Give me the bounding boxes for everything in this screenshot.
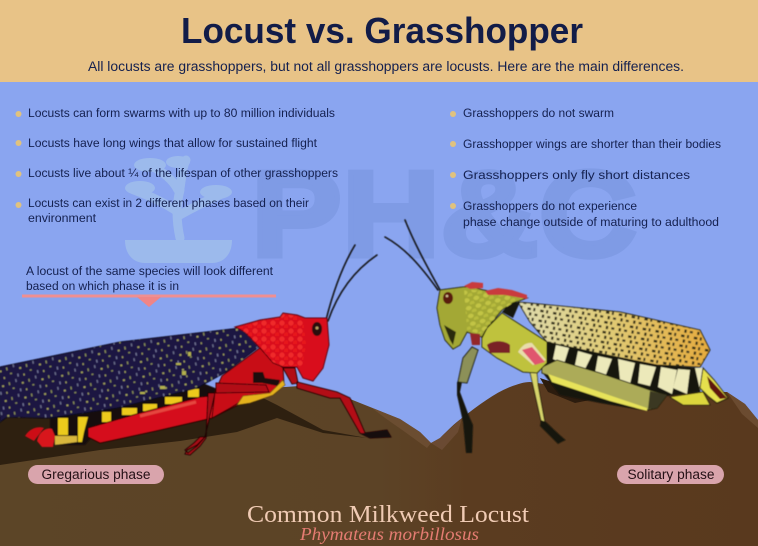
ground shadow under locust <box>0 398 367 465</box>
hind tibia <box>185 393 215 455</box>
wing <box>0 328 260 422</box>
abdomen stripes <box>540 340 703 396</box>
head and pronotum <box>437 287 527 349</box>
antennae <box>326 245 377 321</box>
callout: phase note: A locust of the same species will look different <box>26 264 274 278</box>
front tibia <box>457 382 473 453</box>
callout: phase note: based on which phase it is in <box>26 279 179 293</box>
header band <box>0 0 758 82</box>
illustration: solitary grasshopper <box>385 220 728 453</box>
watermark: PH&C letters: PH&C <box>251 146 637 282</box>
hind femur dark teeth <box>542 372 647 411</box>
thorax <box>482 313 547 373</box>
neck <box>470 333 480 345</box>
eye <box>443 292 453 304</box>
illustration: gregarious locust <box>0 245 391 455</box>
mid femur <box>216 383 269 393</box>
thorax red spot <box>487 341 510 353</box>
antennae <box>385 220 440 290</box>
subtitle: All locusts are grasshoppers, but not all grasshoppers are locusts. Here are the main differences. <box>88 59 684 74</box>
locust facts list: Locusts can form swarms with up to 80 million individuals <box>28 106 335 120</box>
callout: phase note <box>22 264 276 307</box>
ground shadow under grasshopper <box>540 378 600 403</box>
thorax pink spot <box>518 343 546 365</box>
grasshopper facts list <box>450 106 721 229</box>
grasshopper facts list: Grasshoppers do not experience <box>463 199 637 213</box>
grasshopper facts list: Grasshopper wings are shorter than their bodies <box>463 137 721 151</box>
wing <box>518 302 710 367</box>
mouth marks <box>444 325 456 345</box>
thorax black marks <box>253 372 280 386</box>
tail lobes <box>25 427 44 441</box>
pronotum and head <box>235 313 329 381</box>
grasshopper facts list: phase change outside of maturing to adulthood <box>463 215 719 229</box>
grasshopper facts list: Grasshoppers only fly short distances <box>463 168 690 182</box>
hind femur <box>542 360 667 410</box>
hind femur <box>88 393 242 443</box>
label: solitary phase <box>617 465 724 484</box>
front leg <box>283 368 298 384</box>
ground hills <box>0 382 758 546</box>
locust facts list: Locusts have long wings that allow for sustained flight <box>28 136 318 150</box>
label: solitary phase: Solitary phase <box>628 467 714 482</box>
locust facts list <box>16 106 338 225</box>
label: gregarious phase <box>28 465 164 484</box>
thorax <box>212 348 284 418</box>
label: gregarious phase: Gregarious phase <box>42 467 150 482</box>
eye <box>312 322 322 336</box>
abdomen stripes <box>50 384 225 445</box>
mid leg <box>530 372 565 443</box>
title: Locust vs. Grasshopper <box>181 10 583 51</box>
species common name: Common Milkweed Locust <box>247 502 529 528</box>
red crest <box>464 282 527 299</box>
front femur <box>458 347 478 383</box>
species scientific name: Phymateus morbillosus <box>299 524 479 544</box>
dark wing base <box>502 302 520 318</box>
locust facts list: Locusts live about ¼ of the lifespan of other grasshoppers <box>28 166 338 180</box>
locust facts list: Locusts can exist in 2 different phases based on their <box>28 196 309 210</box>
yellow underside <box>237 380 285 405</box>
grasshopper facts list: Grasshoppers do not swarm <box>463 106 614 120</box>
locust facts list: environment <box>28 211 97 225</box>
tail <box>700 368 728 403</box>
watermark: bonsai logo <box>125 156 232 263</box>
